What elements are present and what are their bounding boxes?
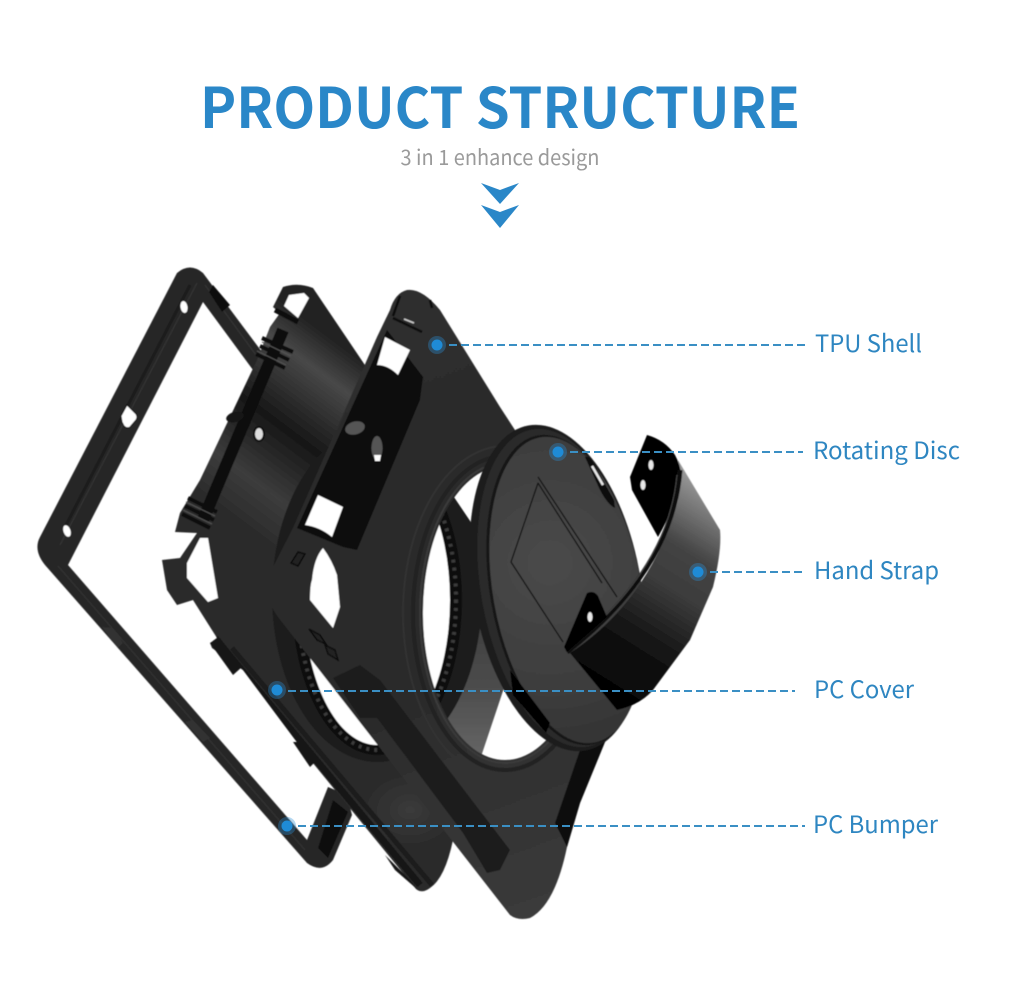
TPU shell layer (267, 290, 612, 919)
disc lower slot (510, 670, 550, 733)
strap outer face (570, 460, 720, 710)
cover camera hole (254, 427, 264, 441)
PC bumper frame (37, 268, 352, 868)
callout: PC Cover: PC Cover (814, 670, 915, 705)
shell camera openings (344, 419, 366, 437)
callout: PC Bumper: PC Bumper (813, 805, 939, 840)
callout: PC Cover (268, 670, 915, 705)
shell side buttons (291, 552, 338, 660)
callout: Hand Strap (689, 551, 939, 586)
subtitle: 3 in 1 enhance design (400, 142, 600, 172)
strap upper tab (630, 435, 681, 537)
callout: TPU Shell (428, 324, 922, 359)
rotating disc (446, 411, 668, 765)
strap inner edge (567, 470, 680, 652)
frame button cut-out (121, 405, 137, 428)
strap rivet holes (588, 460, 654, 622)
shell ring step (403, 446, 607, 780)
shell cut-outs (305, 337, 410, 628)
frame screw holes (62, 300, 188, 538)
cover spring ribs (182, 310, 298, 528)
cover ring lip (273, 472, 480, 762)
callout: Rotating Disc: Rotating Disc (813, 431, 960, 466)
cover ring opening (292, 445, 462, 755)
product illustration: exploded case (37, 268, 720, 919)
cover top loop (284, 293, 309, 318)
infographic canvas (36, 86, 960, 920)
shell lower recess (333, 665, 510, 873)
shell top slots (393, 296, 432, 332)
callout: PC Bumper (278, 805, 939, 840)
disc upper slot (585, 457, 615, 508)
callout: Hand Strap: Hand Strap (814, 551, 939, 586)
callout: TPU Shell: TPU Shell (815, 324, 922, 359)
hand strap (564, 435, 720, 710)
shell top recess (297, 330, 423, 550)
cover hook notch (187, 538, 218, 602)
cover side tabs (210, 410, 418, 890)
shell black side strip (555, 737, 607, 847)
callout: Rotating Disc (549, 431, 960, 466)
disc kickstand outline (511, 477, 617, 642)
PC cover layer (162, 285, 540, 891)
title: PRODUCT STRUCTURE (200, 64, 800, 145)
icon: double down chevron (481, 183, 519, 228)
strap lower tab (564, 592, 607, 652)
